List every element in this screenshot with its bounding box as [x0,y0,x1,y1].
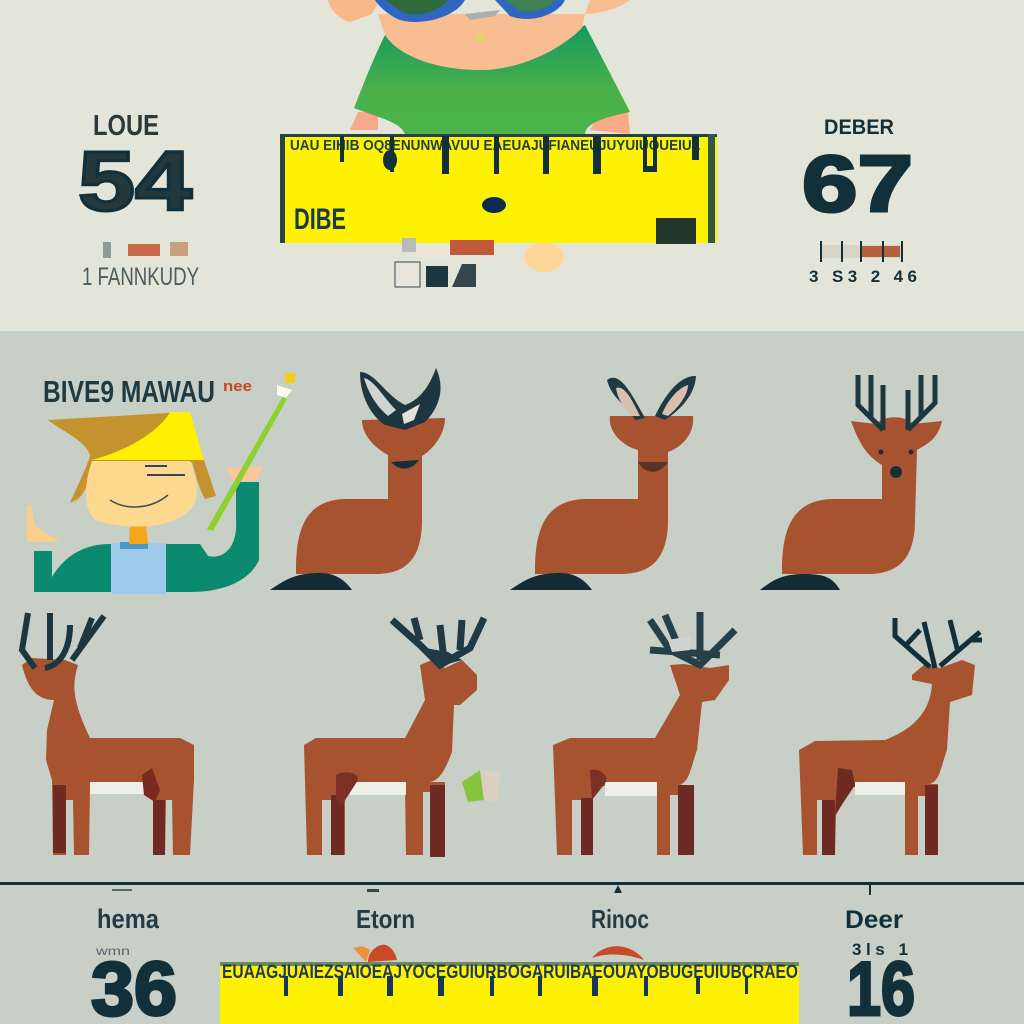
antlers [607,376,696,420]
antlers [392,618,484,666]
deer: standing 1 [22,613,194,855]
stat label: DEBER [824,116,894,139]
column label: bottom two: Etorn [356,904,415,934]
divider with ticks [0,882,1024,895]
illustration: child with goggles and green shirt [328,0,630,272]
stat label: LOUE [93,110,159,142]
small chart under ruler [395,238,494,287]
antlers [22,613,104,668]
illustration: teacher with pointer [27,373,295,594]
ruler: bottom yellow ruler [220,962,799,1024]
deer: standing 4 [799,618,982,855]
panel: top background [0,0,1024,331]
stat caption: 1 FANNKUDY [82,263,199,291]
stat: right top [802,116,917,286]
stat number: 67 [802,139,913,228]
stat mini scale [103,242,188,258]
ruler label: DIBE [294,203,346,236]
deer: seated 1 [270,368,445,590]
antlers [895,618,982,668]
deer: standing 3 [553,612,735,855]
heading: lower panel title: BIVE9 MAWAU [43,374,215,409]
caption: 3ls 1: 3ls 1 [852,940,908,959]
heading accent: nee [223,378,252,395]
stat caption: 3 S3 2 46 [809,267,917,286]
stat mini scale [820,241,903,262]
antlers [650,612,735,665]
antlers [858,375,935,430]
deer: standing 2 [304,618,484,857]
stat: left top [78,110,199,291]
red arcs above ruler [353,945,644,962]
panel: lower background [0,331,1024,1024]
ruler: top yellow ruler [280,134,717,244]
antlers [360,368,441,430]
column label: deer: Deer [845,906,903,934]
deer: seated 2 [510,376,696,590]
small caption over 36: wmn [95,944,130,958]
ruler: bottom yellow ruler: EUAAGJUAIEZSAIOEAJYOCEGUIURBOGARUIBAEOUAYOBUGEUIUBCRAEO [222,962,798,983]
small flag icon [462,770,500,802]
column label: bottom three: Rinoc [591,904,649,934]
stat number: 54 [78,134,192,228]
deer: seated 3 [760,375,942,590]
column label: bottom one: hema [97,904,160,934]
ruler: top yellow ruler: UAU EIHIB OQ8ENUNWAVUU EAEUAJUFIANEUJUYUIUOUEIUL [290,137,700,154]
